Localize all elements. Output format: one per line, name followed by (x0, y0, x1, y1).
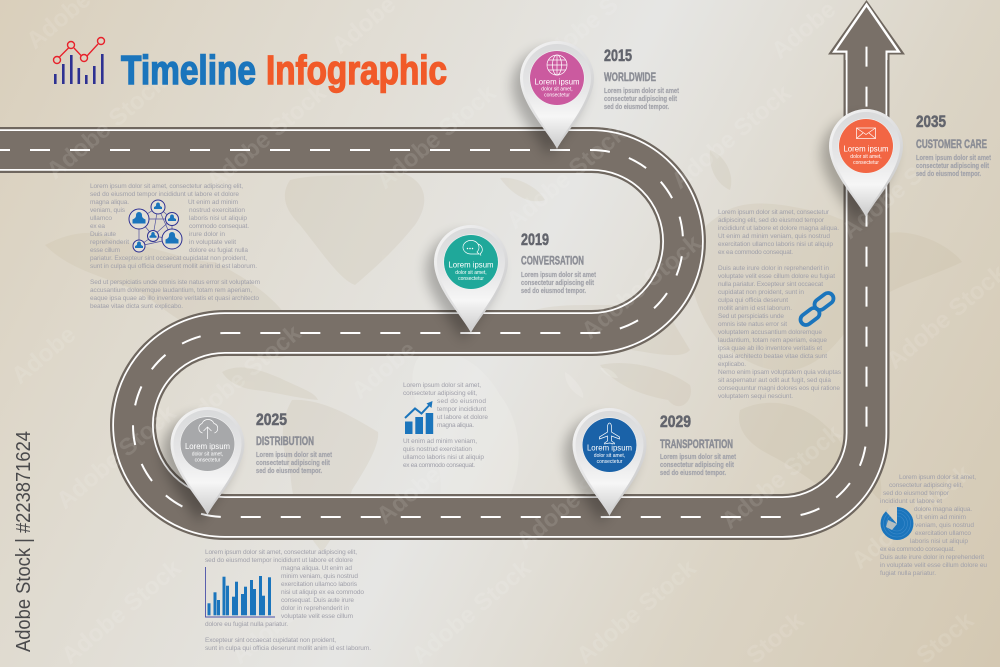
text block: right centre: cupidatat non proident, sunt in (718, 289, 804, 296)
text block: top left: beatae vitae dicta sunt explicabo. (90, 303, 183, 310)
text block: bottom right: fugiat nulla pariatur. (880, 570, 936, 577)
arrow head (828, 0, 905, 62)
label: 2035 customer care: 2035 (916, 113, 946, 131)
text block: bottom right: consectetur adipiscing elit, (889, 482, 963, 489)
label: 2029 transportation: Lorem ipsum dolor sit amet (660, 452, 736, 461)
text block: right centre: voluptate velit esse cillum dolore eu fugiat (718, 273, 835, 280)
text block: centre: quis nostrud exercitation (403, 446, 472, 453)
label: 2025 distribution: consectetur adipiscing elit (256, 458, 330, 467)
title (121, 47, 447, 93)
pin: 2035 customer care: Lorem ipsum (843, 144, 889, 154)
vertical stock id: Adobe Stock | #223871624 (13, 431, 35, 652)
text block: top left: in voluptate velit (189, 239, 236, 246)
watermarks: Adobe Stock (407, 554, 537, 667)
text block: centre: tempor incididunt (437, 406, 486, 413)
label: 2025 distribution: 2025 (256, 411, 287, 429)
text block: centre: magna aliqua. (437, 422, 474, 429)
text block: bottom centre (205, 549, 371, 652)
watermarks: Adobe Sto (837, 147, 946, 245)
text block: centre: ut labore et dolore (437, 414, 488, 421)
text block: bottom centre: sunt in culpa qui officia deserunt mollit anim id est laborum. (205, 645, 371, 652)
label: 2029 transportation: consectetur adipiscing elit (660, 460, 734, 469)
text block: top left: magna aliqua. (90, 199, 129, 206)
text block: centre (403, 382, 488, 469)
watermarks: Adobe Stock (512, 439, 642, 555)
text block: right centre: exercitation ullamco laboris nisi ut aliquip (718, 241, 833, 248)
text block: top left: commodo consequat. (189, 223, 249, 230)
watermarks: Adobe Stock (502, 119, 632, 235)
watermarks: Adobe Stock (227, 554, 357, 667)
text block: bottom centre: exercitation ullamco laboris (281, 581, 358, 588)
text block: right centre: culpa qui officia deserunt (718, 297, 788, 304)
label: 2019 conversation: Lorem ipsum dolor sit amet (521, 270, 596, 279)
text block: centre: ex ea commodo consequat. (403, 462, 475, 469)
label: 2035 customer care (916, 113, 991, 178)
label: 2019 conversation: consectetur adipiscing elit (521, 278, 594, 287)
watermarks: Adobe (7, 321, 81, 390)
pin: 2035 customer care: dolor sit amet, (850, 154, 882, 160)
text block: right centre: ex ea commodo consequat. (718, 249, 793, 256)
pin: 2015 worldwide: Lorem ipsum (534, 78, 580, 86)
label: 2035 customer care: sed do eiusmod tempor. (916, 169, 981, 178)
text block: bottom centre: consequat. Duis aute irure (281, 597, 354, 604)
pin: 2025 distribution: consectetur (195, 458, 221, 464)
text block: top left: irure dolor in (189, 231, 225, 238)
text block: right centre: Lorem ipsum dolor sit amet, consectetur (718, 209, 830, 216)
watermarks: Adobe Stock (372, 79, 502, 195)
label: 2029 transportation: TRANSPORTATION (660, 439, 733, 451)
text block: top left: dolore eu fugiat nulla (189, 247, 248, 254)
text block: bottom right: incididunt ut labore et (880, 498, 942, 505)
text block: top left: eaque ipsa quae ab illo inventore veritatis et quasi architecto (90, 295, 259, 302)
pin: 2029 transportation (564, 408, 646, 524)
text block: bottom right: Lorem ipsum dolor sit amet, (899, 474, 976, 481)
icon: envelope (856, 128, 876, 138)
watermarks: Adobe Stock (202, 79, 332, 195)
watermarks: Adobe Stock (572, 554, 702, 667)
watermarks: Adobe Stock (52, 399, 182, 515)
text block: right centre: Ut enim ad minim veniam, quis nostrud (718, 233, 830, 240)
text block: right centre: consequuntur magni dolores eos qui ratione (718, 385, 840, 392)
label: 2029 transportation: sed do eiusmod tempor. (660, 468, 726, 477)
text block: right centre: voluptatem accusantium doloremque (718, 329, 822, 336)
icon: chain link (798, 291, 836, 327)
icon: cloud upload (199, 420, 218, 439)
text block: bottom centre: minim veniam, quis nostrud (281, 573, 358, 580)
watermarks: Adobe Stock (57, 554, 187, 667)
text block: centre: ullamco laboris nisi ut aliquip (403, 454, 484, 461)
text block: centre: consectetur adipiscing elit, (403, 390, 477, 397)
label: 2015 worldwide: Lorem ipsum dolor sit amet (604, 86, 679, 95)
text block: right centre: sit aspernatur aut odit aut fugit, sed quia (718, 377, 831, 384)
pin: 2019 conversation: Lorem ipsum (448, 260, 494, 270)
text block: right centre: quasi architecto beatae vitae dicta sunt (718, 353, 827, 360)
pin: 2029 transportation: consectetur (597, 459, 623, 465)
bar chart (206, 567, 275, 617)
pin: 2015 worldwide: consectetur (544, 92, 570, 98)
title: Timeline (121, 47, 256, 93)
text block: top left: sunt in culpa qui officia deserunt mollit anim id est laborum. (90, 263, 257, 270)
pin: 2015 worldwide: dolor sit amet, (541, 86, 573, 92)
icon: airplane (600, 423, 620, 444)
text block: top left: laboris nisi ut aliquip (189, 215, 247, 222)
text block: bottom centre: dolor in reprehenderit in (281, 605, 349, 612)
label: 2015 worldwide: consectetur adipiscing elit (604, 94, 677, 103)
pin: 2029 transportation: dolor sit amet, (594, 453, 625, 459)
text block: top left: pariatur. Excepteur sint occaecat cupidatat non proident, (90, 255, 247, 262)
text block: top left: esse cillum (90, 247, 120, 254)
text block: bottom right: Ut enim ad minim (916, 514, 966, 521)
text block: top left: Sed ut perspiciatis unde omnis iste natus error sit voluptatem (90, 279, 260, 286)
text block: right centre: Duis aute irure dolor in reprehenderit in (718, 265, 829, 272)
text block: bottom centre: nisi ut aliquip ex ea commodo (281, 589, 364, 596)
label: 2019 conversation (521, 231, 596, 295)
text block: top left: Duis aute (90, 231, 116, 238)
text block: right centre: adipiscing elit, sed do eiusmod tempor (718, 217, 825, 224)
text block: right centre: Nemo enim ipsam voluptatem quia voluptas (718, 369, 842, 376)
label: 2015 worldwide: 2015 (604, 47, 632, 65)
text block: bottom centre: magna aliqua. Ut enim ad (281, 565, 352, 572)
text block: top left: accusantium doloremque laudantium, totam rem aperiam, (90, 287, 252, 294)
text block: bottom right: laboris nisi ut aliquip (910, 538, 968, 545)
text block: top left: sed do eiusmod tempor incididunt ut labore et dolore (90, 191, 239, 198)
text block: bottom right (880, 474, 987, 577)
road (0, 0, 905, 517)
text block: bottom centre: sed do eiusmod tempor incididunt ut labore et dolore (205, 557, 353, 564)
watermarks: Adobe Stock (847, 459, 977, 575)
watermarks: Adobe Stock (42, 69, 172, 185)
logo icon (54, 38, 104, 84)
label: 2029 transportation: 2029 (660, 413, 691, 431)
text block: top left: Lorem ipsum dolor sit amet, consectetur adipiscing elit, (90, 183, 243, 190)
pin: 2029 transportation: Lorem ipsum (587, 444, 632, 452)
label: 2015 worldwide: sed do eiusmod tempor. (604, 102, 669, 111)
pin: 2035 customer care (821, 109, 903, 225)
label: 2025 distribution: DISTRIBUTION (256, 436, 314, 448)
pin: 2025 distribution: Lorem ipsum (185, 442, 230, 451)
text block: bottom right: veniam, quis nostrud (915, 522, 974, 529)
pin: 2035 customer care: consectetur (853, 160, 879, 166)
text block: right centre: laudantium, totam rem aperiam, eaque (718, 337, 827, 344)
text block: right centre: explicabo. (718, 361, 746, 368)
title: Infographic (266, 47, 447, 93)
pin: 2019 conversation (426, 225, 508, 341)
label: 2015 worldwide: WORLDWIDE (604, 72, 656, 84)
icon: globe (547, 55, 567, 75)
text block: centre: Ut enim ad minim veniam, (403, 438, 477, 445)
text block: right centre: Sed ut perspiciatis unde (718, 313, 784, 320)
text block: bottom right: in voluptate velit esse cillum dolore eu (880, 562, 987, 569)
text block: top left (90, 183, 260, 310)
text block: right centre: ipsa quae ab illo inventore veritatis et (718, 345, 822, 352)
text block: top left: veniam, quis (90, 207, 126, 214)
label: 2025 distribution: sed do eiusmod tempor. (256, 466, 322, 475)
label: 2025 distribution: Lorem ipsum dolor sit amet (256, 450, 332, 459)
text block: bottom right: exercitation ullamco (915, 530, 971, 537)
text block: top left: nostrud exercitation (189, 207, 245, 214)
road edge (0, 50, 866, 517)
text block: right centre: mollit anim id est laborum. (718, 305, 792, 312)
pin: 2015 worldwide (512, 41, 594, 157)
label: 2025 distribution (256, 411, 332, 475)
text block: centre: sed do eiusmod (437, 398, 486, 405)
label: 2019 conversation: CONVERSATION (521, 256, 584, 268)
text block: bottom centre: Lorem ipsum dolor sit amet, consectetur adipiscing elit, (205, 549, 357, 556)
pin: 2019 conversation: dolor sit amet, (455, 270, 487, 276)
text block: top left: Ut enim ad minim (188, 199, 238, 206)
label: 2029 transportation (660, 413, 736, 477)
text block: bottom right: dolore magna aliqua. (914, 506, 972, 513)
label: 2015 worldwide (604, 47, 679, 111)
text block: bottom right: ex ea commodo consequat. (880, 546, 955, 553)
text block: top left: ex ea (90, 223, 105, 230)
watermarks: Adobe Stock (177, 319, 307, 435)
watermarks: Adobe (372, 461, 446, 530)
pin: 2025 distribution (162, 407, 244, 523)
watermarks: Adobe Stock (667, 79, 797, 195)
text block: bottom centre: Excepteur sint occaecat cupidatat non proident, (205, 637, 336, 644)
pin: 2025 distribution: dolor sit amet, (192, 452, 223, 458)
text block: bottom right: Duis aute irure dolor in reprehenderit (880, 554, 984, 561)
pin: 2019 conversation: consectetur (458, 276, 484, 282)
text block: centre: Lorem ipsum dolor sit amet, (403, 382, 481, 389)
text block: top left: reprehenderit (90, 239, 129, 246)
icon: chat bubbles (463, 240, 482, 256)
icon: growth bars (405, 401, 433, 434)
lane dashes (0, 30, 866, 517)
text block: right centre: omnis iste natus error sit (718, 321, 787, 328)
text block: bottom right: sed do eiusmod tempor (883, 490, 950, 497)
text block: bottom centre: voluptate velit esse cillum (281, 613, 353, 620)
label: 2019 conversation: 2019 (521, 231, 549, 249)
watermarks: Adobe (347, 336, 421, 405)
watermarks: Adobe Stock (717, 419, 847, 535)
world map silhouette (45, 150, 962, 552)
text block: right centre: voluptatem sequi nesciunt. (718, 393, 793, 400)
text block: right centre (718, 209, 842, 400)
icon: network (129, 200, 182, 252)
text block: top left: ullamco (90, 215, 112, 222)
label: 2019 conversation: sed do eiusmod tempor. (521, 286, 586, 295)
text block: right centre: incididunt ut labore et dolore magna aliqua. (718, 225, 839, 232)
watermarks: Adobe Stock (577, 229, 707, 345)
text block: bottom centre: dolore eu fugiat nulla pariatur. (205, 621, 288, 628)
text block: right centre: nulla pariatur. Excepteur sint occaecat (718, 281, 823, 288)
icon: radial pie (880, 506, 914, 540)
